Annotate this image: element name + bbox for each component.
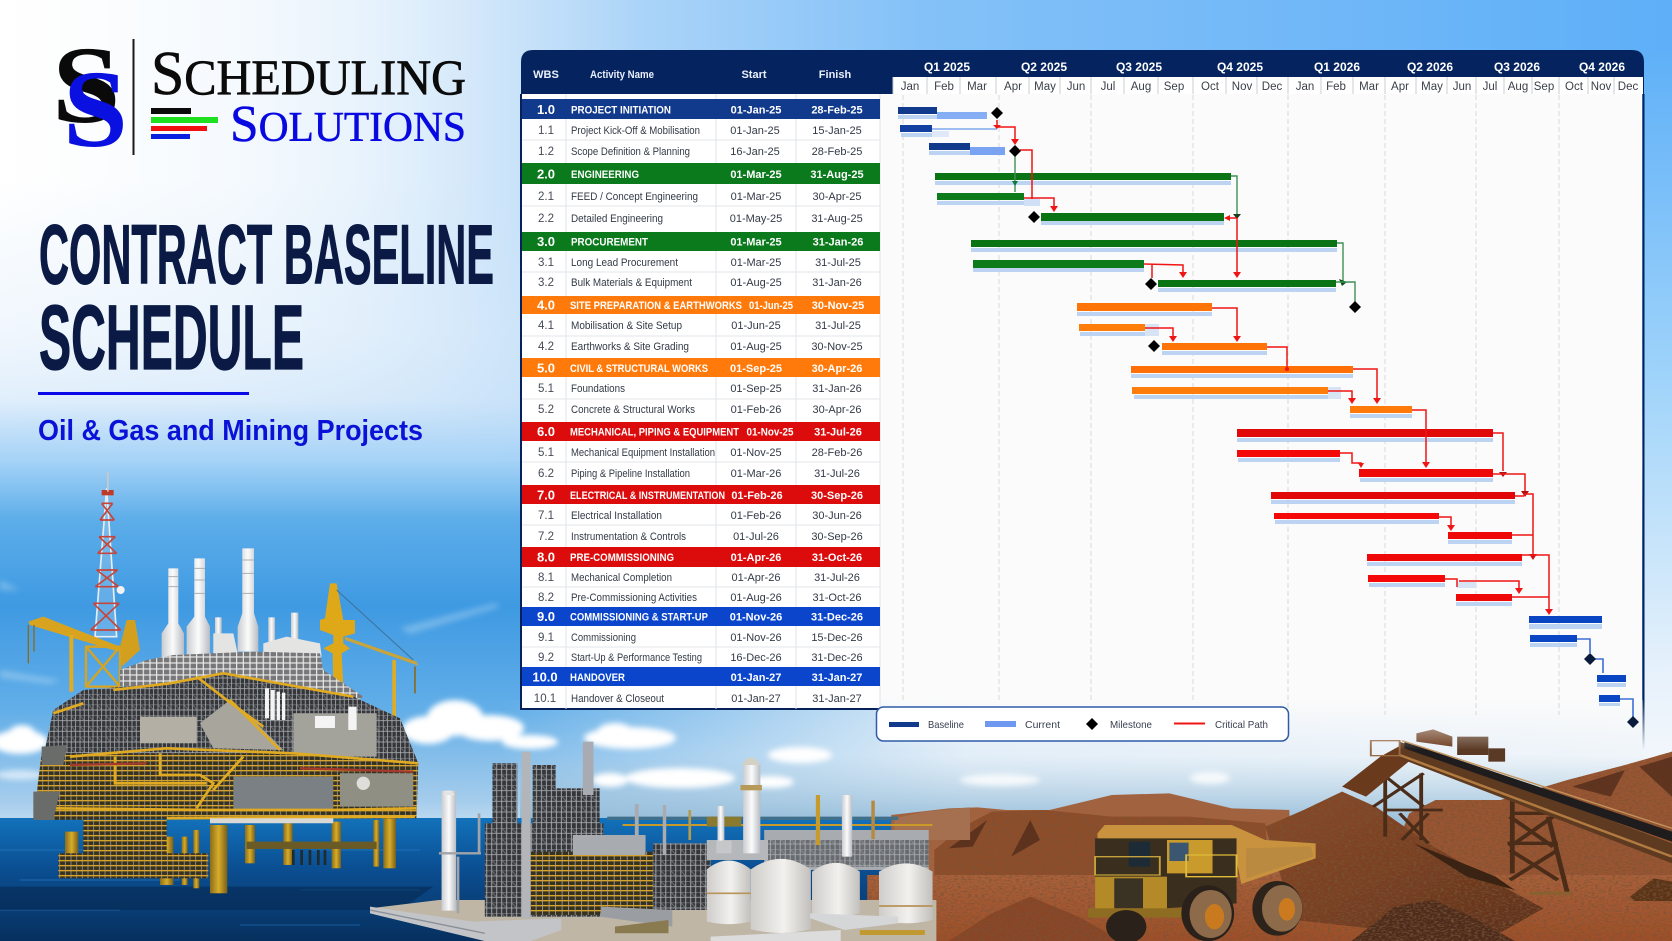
process columns and towers <box>439 742 875 918</box>
row 2.1: 30-Apr-25 <box>813 191 861 203</box>
row 5.0: CIVIL & STRUCTURAL WORKS <box>570 363 708 375</box>
row 9.0: 9.0 <box>537 609 555 624</box>
logo mark: interlocked S letters: S <box>63 48 128 170</box>
row 8.1 <box>538 572 860 584</box>
row 10.1: 10.1 <box>534 693 556 705</box>
row 1.2: 1.2 <box>538 146 554 158</box>
timeline header: quarters: Q4 2026 <box>1579 60 1625 74</box>
row 4.1: 31-Jul-25 <box>815 320 861 332</box>
row 7.1: 01-Feb-26 <box>731 510 781 522</box>
row 8.0: 31-Oct-26 <box>812 552 862 564</box>
row 7.0: 30-Sep-26 <box>811 490 863 502</box>
row 6.2: 6.2 <box>538 468 554 480</box>
row 9.2: 31-Dec-26 <box>811 652 863 664</box>
row 6.1: Mechanical Equipment Installation <box>571 447 715 459</box>
row 2.2 <box>538 213 863 225</box>
row 2.0: 01-Mar-25 <box>730 169 782 181</box>
row 7.1: 30-Jun-26 <box>812 510 862 522</box>
row 1.0 <box>522 99 880 119</box>
row 9.1 <box>538 632 863 644</box>
table header <box>533 69 851 81</box>
row 7.0: ELECTRICAL & INSTRUMENTATION <box>570 490 725 502</box>
critical path links <box>993 120 1553 615</box>
legend: baseline <box>889 719 964 731</box>
row 1.0: 1.0 <box>537 102 555 117</box>
subtitle: Oil & Gas and Mining Projects <box>38 415 423 447</box>
wordmark: Solutions: SOLUTIONS <box>230 96 466 153</box>
timeline header: quarters: Q2 2026 <box>1407 60 1453 74</box>
row 5.1 <box>538 383 862 395</box>
row 4.0: SITE PREPARATION & EARTHWORKS <box>570 300 742 312</box>
row 8.0: PRE-COMMISSIONING <box>570 552 674 564</box>
row 6.2 <box>538 468 860 480</box>
row 1.1: Project Kick-Off & Mobilisation <box>571 125 700 137</box>
legend: milestone: Milestone <box>1110 719 1152 731</box>
row 9.0: 01-Nov-26 <box>730 612 782 624</box>
row 7.2: 30-Sep-26 <box>811 531 863 543</box>
row 10.1: Handover & Closeout <box>571 693 664 705</box>
row 10.0: 31-Jan-27 <box>812 672 862 684</box>
gantt bars: 3.0 procurement <box>971 240 1337 292</box>
row 5.2: 5.2 <box>538 404 554 416</box>
process deck <box>120 652 363 703</box>
timeline header: months: Dec <box>1618 81 1638 93</box>
gantt chart bars and milestones <box>898 107 1639 728</box>
row 8.1: 8.1 <box>538 572 554 584</box>
timeline header: months: May <box>1421 81 1443 93</box>
row 6.0: MECHANICAL, PIPING & EQUIPMENT <box>570 426 739 438</box>
gantt bars: 8.0 pre-commissioning <box>1367 554 1522 606</box>
row 1.1 <box>538 125 862 137</box>
row 4.2: Earthworks & Site Grading <box>571 341 689 353</box>
gantt bars: 10.0 handover <box>1597 675 1626 706</box>
row 2.1: FEED / Concept Engineering <box>571 191 698 203</box>
timeline header: months: Mar <box>967 81 987 93</box>
row 3.1: 3.1 <box>538 257 554 269</box>
row 5.1: Foundations <box>571 383 625 395</box>
row 10.0 <box>522 667 880 686</box>
row 4.2: 30-Nov-25 <box>811 341 863 353</box>
row 6.2: Piping & Pipeline Installation <box>571 468 690 480</box>
timeline header: months: Feb <box>934 81 954 93</box>
timeline header: months: Dec <box>1262 81 1282 93</box>
timeline header: quarters: Q1 2025 <box>924 60 970 74</box>
flare stacks <box>162 548 298 660</box>
timeline header: months: Jul <box>1483 81 1497 93</box>
row 2.2: Detailed Engineering <box>571 213 663 225</box>
logo: Scheduling Solutions <box>52 25 466 170</box>
legend: critical path: Critical Path <box>1215 719 1268 731</box>
row 9.1: 15-Dec-26 <box>811 632 863 644</box>
row 1.2 <box>538 146 862 158</box>
gantt bars: 1.0 project initiation <box>898 107 1005 155</box>
row 2.1 <box>538 191 861 203</box>
row 10.1 <box>534 693 862 705</box>
illustration: onshore refinery with storage tanks <box>370 742 970 941</box>
row 2.2: 01-May-25 <box>730 213 782 225</box>
row 5.2 <box>538 404 861 416</box>
timeline header: months: Aug <box>1131 81 1151 93</box>
row 4.2 <box>538 341 863 353</box>
row 7.0 <box>522 485 880 504</box>
row 7.1: 7.1 <box>538 510 554 522</box>
row 3.2 <box>538 277 862 289</box>
panel: baseline schedule table and gantt <box>521 50 1644 750</box>
row 6.2: 31-Jul-26 <box>814 468 860 480</box>
illustration: offshore oil and gas platform <box>0 472 433 910</box>
timeline header: months: Sep <box>1534 81 1554 93</box>
timeline header: months: Jun <box>1067 81 1085 93</box>
gantt bars: 2.0 engineering <box>935 173 1231 225</box>
row 8.1: 31-Jul-26 <box>814 572 860 584</box>
text: CONTRACT BASELINE <box>39 208 494 302</box>
storage tanks <box>707 859 933 933</box>
row 9.2: 16-Dec-26 <box>730 652 782 664</box>
table rows <box>522 94 880 709</box>
legend: baseline: Baseline <box>928 719 964 731</box>
timeline header: months: Oct <box>1201 81 1220 93</box>
row 9.0: 31-Dec-26 <box>811 612 863 624</box>
row 7.2: 7.2 <box>538 531 554 543</box>
row 4.1: 4.1 <box>538 320 554 332</box>
row 4.1: Mobilisation & Site Setup <box>571 320 682 332</box>
title: SCHEDULE <box>39 287 304 389</box>
row 6.1: 01-Nov-25 <box>730 447 782 459</box>
logo icon: schedule bars <box>151 108 218 139</box>
timeline header: months: Jun <box>1453 81 1471 93</box>
legend: critical path <box>1174 719 1268 731</box>
timeline header: quarters: Q3 2026 <box>1494 60 1540 74</box>
row 2.1: 01-Mar-25 <box>731 191 781 203</box>
mining truck <box>1088 825 1316 941</box>
row 6.0: 01-Nov-25 <box>746 426 794 438</box>
row 1.1: 01-Jan-25 <box>730 125 780 137</box>
communications tower <box>91 472 125 637</box>
row 5.2: 01-Feb-26 <box>731 404 781 416</box>
row 9.2 <box>538 652 863 664</box>
timeline header: months: Apr <box>1004 81 1022 93</box>
row 4.2: 01-Aug-25 <box>730 341 782 353</box>
row 7.1 <box>538 510 862 522</box>
row 8.2: Pre-Commissioning Activities <box>571 592 697 604</box>
row 1.2: Scope Definition & Planning <box>571 146 690 158</box>
timeline header: months: Nov <box>1591 81 1611 93</box>
row 3.0: PROCUREMENT <box>571 236 648 248</box>
row 3.2: Bulk Materials & Equipment <box>571 277 692 289</box>
row 6.1: 28-Feb-26 <box>812 447 862 459</box>
row 1.2: 16-Jan-25 <box>730 146 780 158</box>
row 9.2: 9.2 <box>538 652 554 664</box>
row 10.0: 01-Jan-27 <box>731 672 781 684</box>
row 4.1: 01-Jun-25 <box>731 320 781 332</box>
crane right <box>320 583 418 717</box>
wordmark: Scheduling: SCHEDULING <box>151 40 466 108</box>
row 5.0: 30-Apr-26 <box>812 363 862 375</box>
row 4.1 <box>538 320 861 332</box>
row 5.1: 01-Sep-25 <box>730 383 782 395</box>
timeline header: quarters <box>924 60 1625 74</box>
row 5.0 <box>522 358 880 377</box>
dependency links: green <box>1012 155 1355 302</box>
timeline header: months: Feb <box>1326 81 1346 93</box>
row 3.1: 01-Mar-25 <box>731 257 781 269</box>
row 3.2: 31-Jan-26 <box>812 277 862 289</box>
row 6.0: 6.0 <box>537 424 555 439</box>
row 6.1 <box>538 447 862 459</box>
row 2.0 <box>522 163 880 184</box>
row 4.0 <box>522 296 880 314</box>
row 3.2: 3.2 <box>538 277 554 289</box>
row 3.1: Long Lead Procurement <box>571 257 678 269</box>
logo mark: interlocked S letters: S <box>52 25 121 146</box>
row 8.0 <box>522 547 880 567</box>
row 3.2: 01-Aug-25 <box>730 277 782 289</box>
gantt bars: 6.0 mechanical, piping and equipment <box>1237 429 1493 482</box>
timeline header: months: May <box>1034 81 1056 93</box>
row 5.2: 30-Apr-26 <box>813 404 861 416</box>
row 4.2: 4.2 <box>538 341 554 353</box>
row 3.0: 3.0 <box>537 234 555 249</box>
table header: WBS <box>533 69 559 81</box>
row 1.0: 01-Jan-25 <box>731 104 781 116</box>
timeline header: months: Aug <box>1508 81 1528 93</box>
row 8.2: 8.2 <box>538 592 554 604</box>
timeline header: months: Mar <box>1359 81 1379 93</box>
row 10.0: HANDOVER <box>570 672 625 684</box>
row 8.0: 01-Apr-26 <box>731 552 781 564</box>
row 4.0: 4.0 <box>537 298 555 312</box>
table header: Activity Name <box>590 69 654 81</box>
gantt bars: 9.0 commissioning <box>1529 616 1602 647</box>
row 1.0: PROJECT INITIATION <box>571 104 671 116</box>
row 3.0: 01-Mar-25 <box>730 236 782 248</box>
row 1.1: 1.1 <box>538 125 554 137</box>
row 4.0: 30-Nov-25 <box>812 300 864 312</box>
gantt bars: 7.0 electrical and instrumentation <box>1271 492 1515 544</box>
row 8.0: 8.0 <box>537 550 555 564</box>
row 5.0: 01-Sep-25 <box>730 363 782 375</box>
table header: Start <box>741 69 767 81</box>
row 10.1: 01-Jan-27 <box>731 693 781 705</box>
legend: current <box>985 719 1060 731</box>
crane left <box>28 617 140 692</box>
row 9.1: Commissioning <box>571 632 636 644</box>
legend <box>876 707 1288 741</box>
row 1.1: 15-Jan-25 <box>812 125 862 137</box>
table header: Finish <box>819 69 851 81</box>
row 2.0: 2.0 <box>537 166 555 182</box>
row 5.1: 31-Jan-26 <box>812 383 862 395</box>
gantt bars: 5.0 civil and structural <box>1131 366 1412 418</box>
row 2.2: 2.2 <box>538 213 554 225</box>
row 9.0: COMMISSIONING & START-UP <box>570 612 708 624</box>
timeline header: months <box>893 77 1638 94</box>
row 3.1 <box>538 257 861 269</box>
illustration: mining site with truck, ore pile and conveyor <box>867 729 1672 941</box>
row 9.1: 9.1 <box>538 632 554 644</box>
row 6.0 <box>522 422 880 441</box>
timeline header: months: Oct <box>1565 81 1584 93</box>
legend: milestone <box>1086 718 1152 731</box>
row 9.2: Start-Up & Performance Testing <box>571 652 702 664</box>
row 8.1: 01-Apr-26 <box>732 572 780 584</box>
row 8.2: 31-Oct-26 <box>813 592 861 604</box>
row 8.2 <box>538 592 861 604</box>
timeline header: months: Nov <box>1232 81 1252 93</box>
timeline header: months: Sep <box>1164 81 1184 93</box>
legend: current: Current <box>1025 719 1060 731</box>
row 6.1: 5.1 <box>538 447 554 459</box>
row 7.1: Electrical Installation <box>571 510 662 522</box>
row 7.2: Instrumentation & Controls <box>571 531 686 543</box>
row 2.1: 2.1 <box>538 191 554 203</box>
row 6.0: 31-Jul-26 <box>814 426 862 438</box>
row 1.0: 28-Feb-25 <box>811 104 863 116</box>
row 7.2: 01-Jul-26 <box>733 531 779 543</box>
row 5.0: 5.0 <box>537 360 555 376</box>
row 8.2: 01-Aug-26 <box>730 592 782 604</box>
row 3.1: 31-Jul-25 <box>815 257 861 269</box>
row 2.2: 31-Aug-25 <box>811 213 863 225</box>
row 1.2: 28-Feb-25 <box>812 146 862 158</box>
gantt bars: 4.0 site preparation <box>1077 303 1267 355</box>
timeline header: months: Jan <box>901 81 919 93</box>
milestones <box>991 107 1639 728</box>
row 7.2 <box>538 531 863 543</box>
row 10.0: 10.0 <box>532 670 558 684</box>
timeline header: quarters: Q4 2025 <box>1217 60 1263 74</box>
row 8.1: Mechanical Completion <box>571 572 672 584</box>
timeline header: quarters: Q3 2025 <box>1116 60 1162 74</box>
row 10.1: 31-Jan-27 <box>812 693 862 705</box>
timeline header: months: Jul <box>1101 81 1115 93</box>
row 6.2: 01-Mar-26 <box>731 468 781 480</box>
row 9.1: 01-Nov-26 <box>730 632 782 644</box>
title <box>39 208 494 389</box>
row 9.0 <box>522 607 880 626</box>
row 4.0: 01-Jun-25 <box>749 300 793 312</box>
dependency links: blue <box>1577 639 1633 717</box>
timeline header: quarters: Q1 2026 <box>1314 60 1360 74</box>
row 5.2: Concrete & Structural Works <box>571 404 695 416</box>
row 2.0: ENGINEERING <box>571 169 639 181</box>
row 2.0: 31-Aug-25 <box>810 169 864 181</box>
row 3.0 <box>522 232 880 251</box>
timeline header: quarters: Q2 2025 <box>1021 60 1067 74</box>
row 5.1: 5.1 <box>538 383 554 395</box>
timeline header: months: Jan <box>1296 81 1314 93</box>
row 7.0: 7.0 <box>537 488 555 502</box>
row 7.0: 01-Feb-26 <box>731 490 783 502</box>
timeline header: months: Apr <box>1391 81 1409 93</box>
row 3.0: 31-Jan-26 <box>813 236 863 248</box>
